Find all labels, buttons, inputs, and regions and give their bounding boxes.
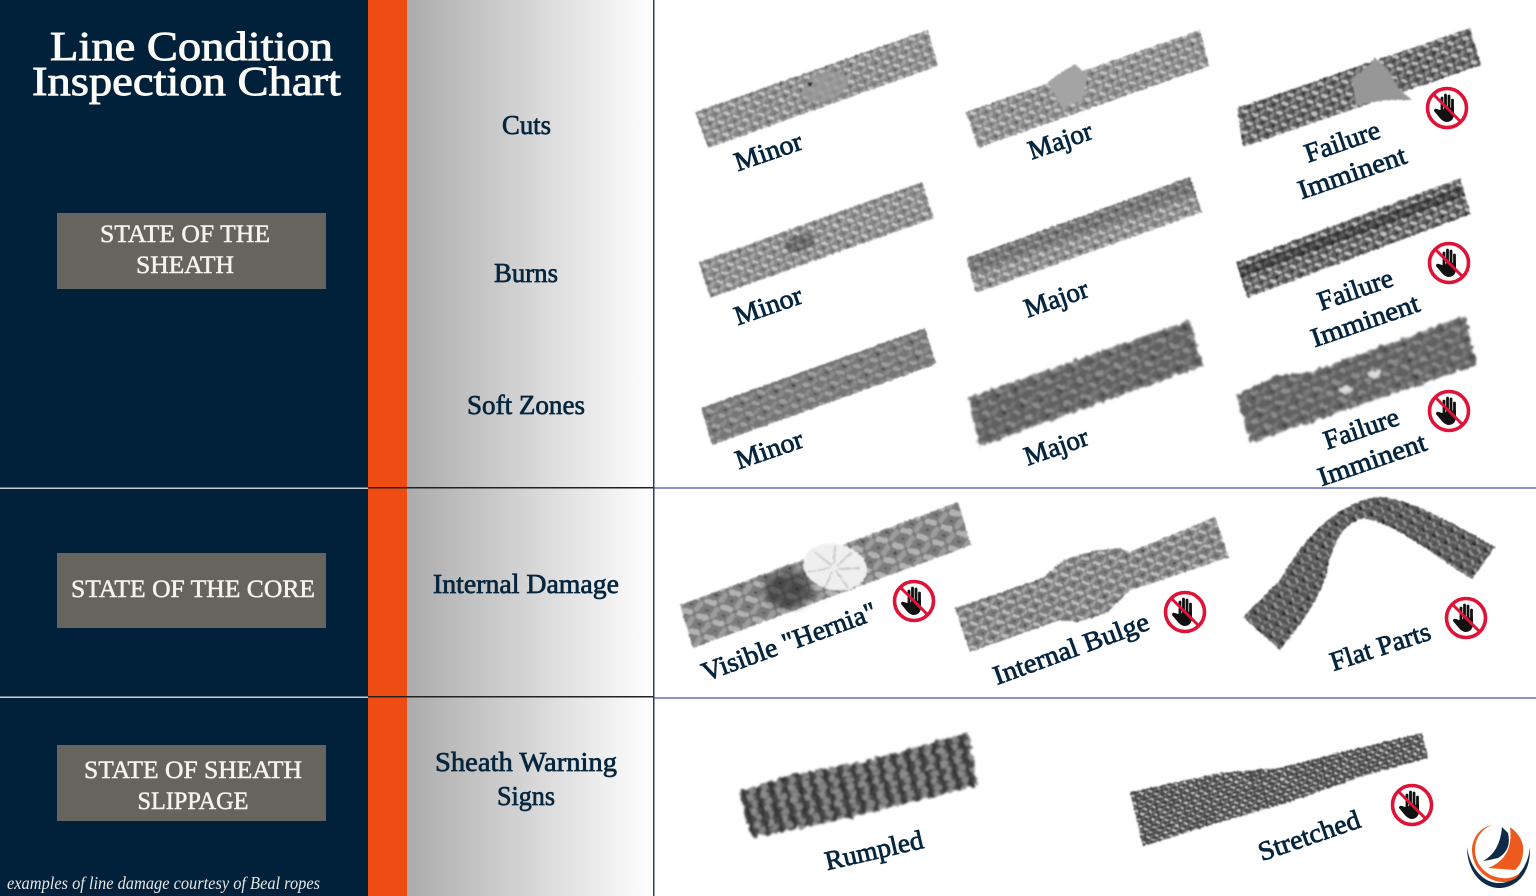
category: internal damage: Internal Damage <box>433 569 619 599</box>
section label: state of sheath slippage: STATE OF SHEATH <box>84 757 302 784</box>
label: failure imminent <box>1294 115 1411 205</box>
label: minor: Minor <box>731 424 807 475</box>
label: major: Major <box>1020 422 1092 471</box>
icon: do not use <box>894 582 934 620</box>
label: failure imminent <box>1307 263 1424 353</box>
rope: stretched <box>1130 733 1428 846</box>
label: failure imminent <box>1314 402 1431 492</box>
category: soft zones: Soft Zones <box>467 390 585 420</box>
label: major: Major <box>1024 116 1096 165</box>
rope: burns minor <box>699 182 934 298</box>
section label: state of the core: STATE OF THE CORE <box>71 576 315 603</box>
rope: cuts major <box>966 30 1209 148</box>
title <box>32 23 342 104</box>
label: failure imminent: Failure <box>1319 402 1403 455</box>
label: failure imminent: Failure <box>1300 115 1384 168</box>
rope: burns major <box>966 177 1202 293</box>
category: burns: Burns <box>494 258 558 288</box>
icon: do not use <box>1446 598 1486 638</box>
icon: do not use <box>1430 392 1468 430</box>
section label: state of sheath slippage <box>57 745 326 821</box>
label: minor: Minor <box>730 126 806 177</box>
title: Inspection Chart <box>32 58 342 104</box>
label: visible hernia: Visible "Hernia" <box>697 596 881 687</box>
credit note: examples of line damage courtesy of Beal ropes <box>7 873 320 893</box>
rope: cuts failure imminent <box>1237 28 1481 147</box>
label: internal bulge: Internal Bulge <box>989 606 1153 691</box>
icon: do not use <box>1428 88 1466 128</box>
label: major: Major <box>1020 274 1092 323</box>
label: failure imminent: Imminent <box>1314 427 1431 492</box>
panel: navy sidebar <box>0 0 368 896</box>
icon: sailboat logo <box>1467 825 1530 888</box>
rope: burns failure imminent <box>1236 178 1471 298</box>
label: flat parts: Flat Parts <box>1326 616 1434 677</box>
category: sheath warning signs <box>435 747 617 811</box>
section label: state of the sheath <box>57 213 326 289</box>
label: failure imminent: Imminent <box>1294 140 1411 205</box>
section label: state of the core <box>57 553 326 628</box>
icon: do not use <box>1166 592 1204 632</box>
label: stretched: Stretched <box>1254 804 1365 867</box>
rope: cuts minor <box>695 30 938 148</box>
rope: rumpled <box>739 732 978 838</box>
section label: state of the sheath: SHEATH <box>136 252 234 279</box>
icon: do not use <box>1392 786 1432 824</box>
panel: orange stripe <box>368 0 407 896</box>
title: Line Condition <box>50 23 333 69</box>
section label: state of the sheath: STATE OF THE <box>100 221 270 248</box>
label: minor: Minor <box>730 280 806 331</box>
category: sheath warning signs: Sheath Warning <box>435 747 617 777</box>
icon: do not use <box>1430 244 1468 282</box>
rope: soft zones minor <box>701 328 936 445</box>
rope: soft zones major <box>968 320 1203 446</box>
rope: visible hernia <box>680 502 971 648</box>
category: cuts: Cuts <box>502 110 551 140</box>
label: rumpled: Rumpled <box>822 824 927 876</box>
rope: internal bulge <box>955 517 1229 652</box>
panel: gradient category column <box>407 0 653 896</box>
category: sheath warning signs: Signs <box>497 781 555 811</box>
section label: state of sheath slippage: SLIPPAGE <box>138 788 248 815</box>
rope: flat parts <box>1243 497 1495 650</box>
rope: soft zones failure imminent <box>1237 316 1476 443</box>
label: failure imminent: Imminent <box>1307 288 1424 353</box>
label: failure imminent: Failure <box>1313 263 1397 316</box>
